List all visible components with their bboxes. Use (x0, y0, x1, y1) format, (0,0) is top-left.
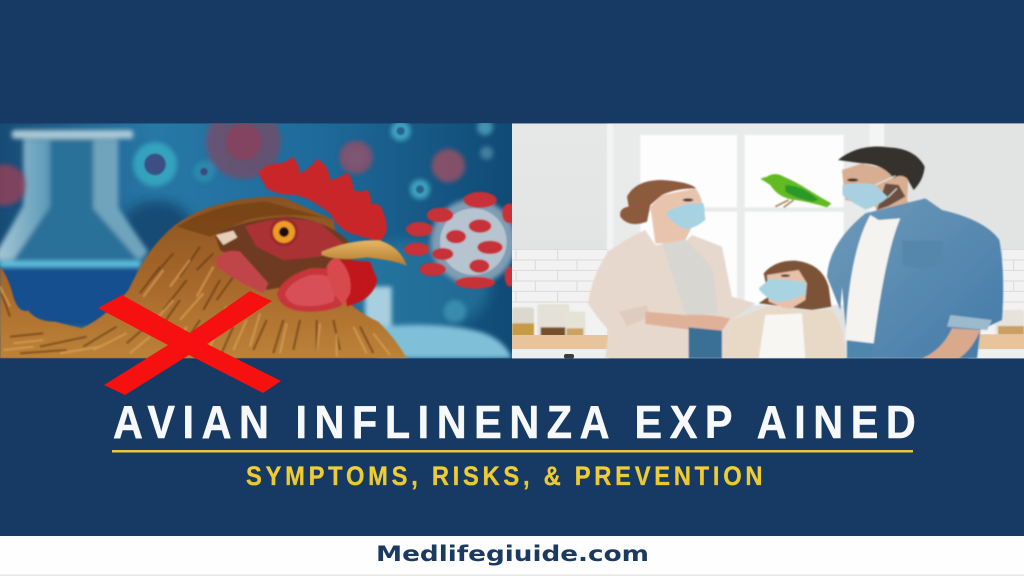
man cuff (947, 315, 992, 330)
storage jars (512, 304, 1024, 336)
man eye (847, 178, 858, 182)
small round flask (365, 287, 512, 358)
man neck and face (841, 162, 910, 212)
man mask (843, 183, 888, 209)
woman hair (620, 180, 696, 224)
man pocket (902, 241, 914, 252)
girl face (767, 270, 807, 310)
woman cuff (620, 306, 648, 326)
tiled backsplash (512, 249, 1024, 336)
flask (0, 130, 148, 333)
man white tee (845, 215, 900, 343)
bird (760, 174, 831, 207)
girl (723, 261, 845, 358)
dark feather strokes (2, 247, 373, 357)
virus particle, large (404, 192, 517, 289)
girl hair (759, 261, 831, 310)
girl cardigan (723, 306, 845, 358)
girl mask (759, 278, 806, 302)
counter (512, 334, 1024, 359)
chicken body and neck (0, 197, 407, 358)
man beard (877, 183, 905, 210)
girl eye (781, 274, 790, 277)
woman neck and face (650, 188, 702, 243)
window (607, 123, 1024, 305)
man hair (838, 147, 925, 190)
woman hands (645, 312, 730, 331)
man (827, 147, 1003, 358)
woman eye (683, 198, 693, 202)
girl tee (759, 313, 805, 358)
face (215, 217, 353, 290)
woman jeans (689, 327, 722, 358)
woman cardigan (588, 230, 755, 358)
eye (269, 217, 299, 247)
beak (322, 240, 407, 266)
chicken (0, 157, 407, 358)
footer bar (0, 536, 1024, 576)
panel: family wearing masks in kitchen (512, 123, 1024, 359)
wattles (340, 260, 377, 307)
man jeans (847, 342, 872, 358)
light feather strokes (0, 260, 390, 357)
title underline (112, 450, 913, 452)
ear lobe (215, 251, 268, 293)
website address: Medlifegiuide.com (376, 542, 649, 566)
icon: red cross (98, 291, 281, 395)
subtitle: SYMPTOMS, RISKS, & PREVENTION (246, 462, 763, 491)
woman (588, 180, 755, 358)
comb (258, 157, 387, 242)
virus particles, background (0, 104, 493, 323)
panel: chicken and virus illustration (0, 104, 517, 358)
woman grey top (662, 239, 719, 315)
man forearm (922, 328, 980, 358)
title: AVIAN INFLINENZA EXP AINED (113, 397, 916, 449)
man denim shirt (827, 198, 1003, 358)
woman mask (665, 203, 705, 229)
